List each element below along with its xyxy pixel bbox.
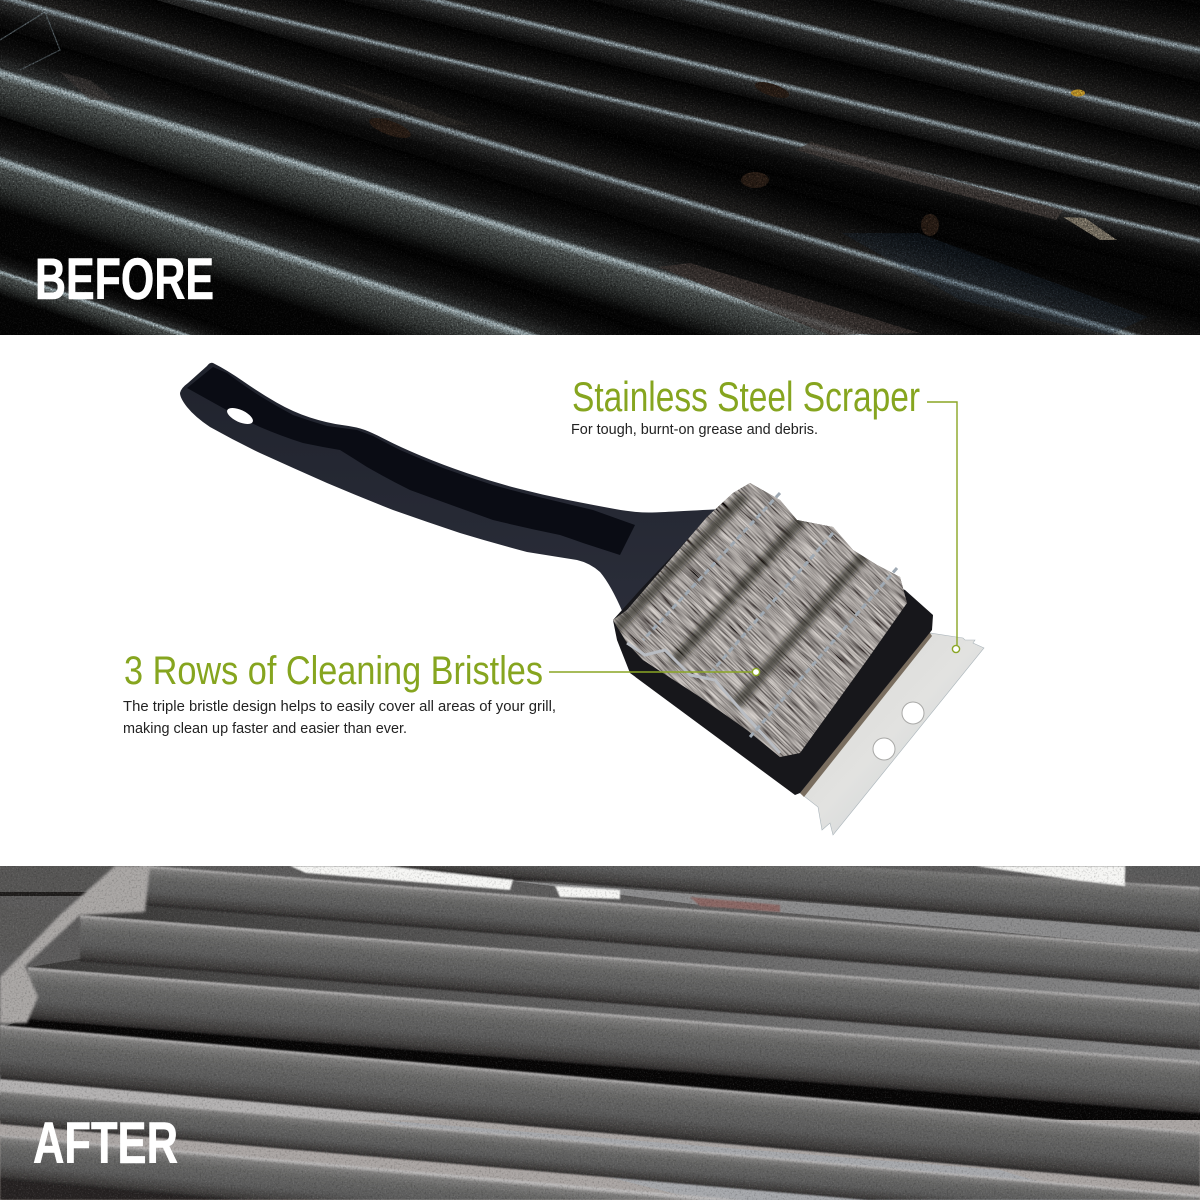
heading: Stainless Steel Scraper xyxy=(572,373,920,420)
description: making clean up faster and easier than ever. xyxy=(123,721,407,737)
hanging hole xyxy=(225,405,255,427)
label: BEFORE: BEFORE xyxy=(35,247,214,312)
head plate xyxy=(613,505,933,795)
description xyxy=(123,699,556,737)
leader line xyxy=(549,671,752,673)
product: grill brush xyxy=(180,362,984,836)
panel: after photo of clean grill grates xyxy=(0,865,1200,1200)
bristles xyxy=(613,483,907,757)
leader dot xyxy=(952,645,960,653)
description: The triple bristle design helps to easily cover all areas of your grill, xyxy=(123,699,556,715)
handle groove xyxy=(187,367,635,555)
brush handle xyxy=(180,363,722,613)
scraper blade xyxy=(800,630,984,835)
leader dot xyxy=(752,668,760,676)
callout: three rows of cleaning bristles xyxy=(123,649,760,737)
label: AFTER: AFTER xyxy=(33,1111,178,1176)
twisted wire rows xyxy=(643,493,897,737)
panel: before photo of dirty grill grates xyxy=(0,0,1200,335)
leader line xyxy=(927,402,957,645)
callout: stainless steel scraper xyxy=(571,373,960,653)
heading: 3 Rows of Cleaning Bristles xyxy=(124,649,543,693)
description: For tough, burnt-on grease and debris. xyxy=(571,422,818,438)
